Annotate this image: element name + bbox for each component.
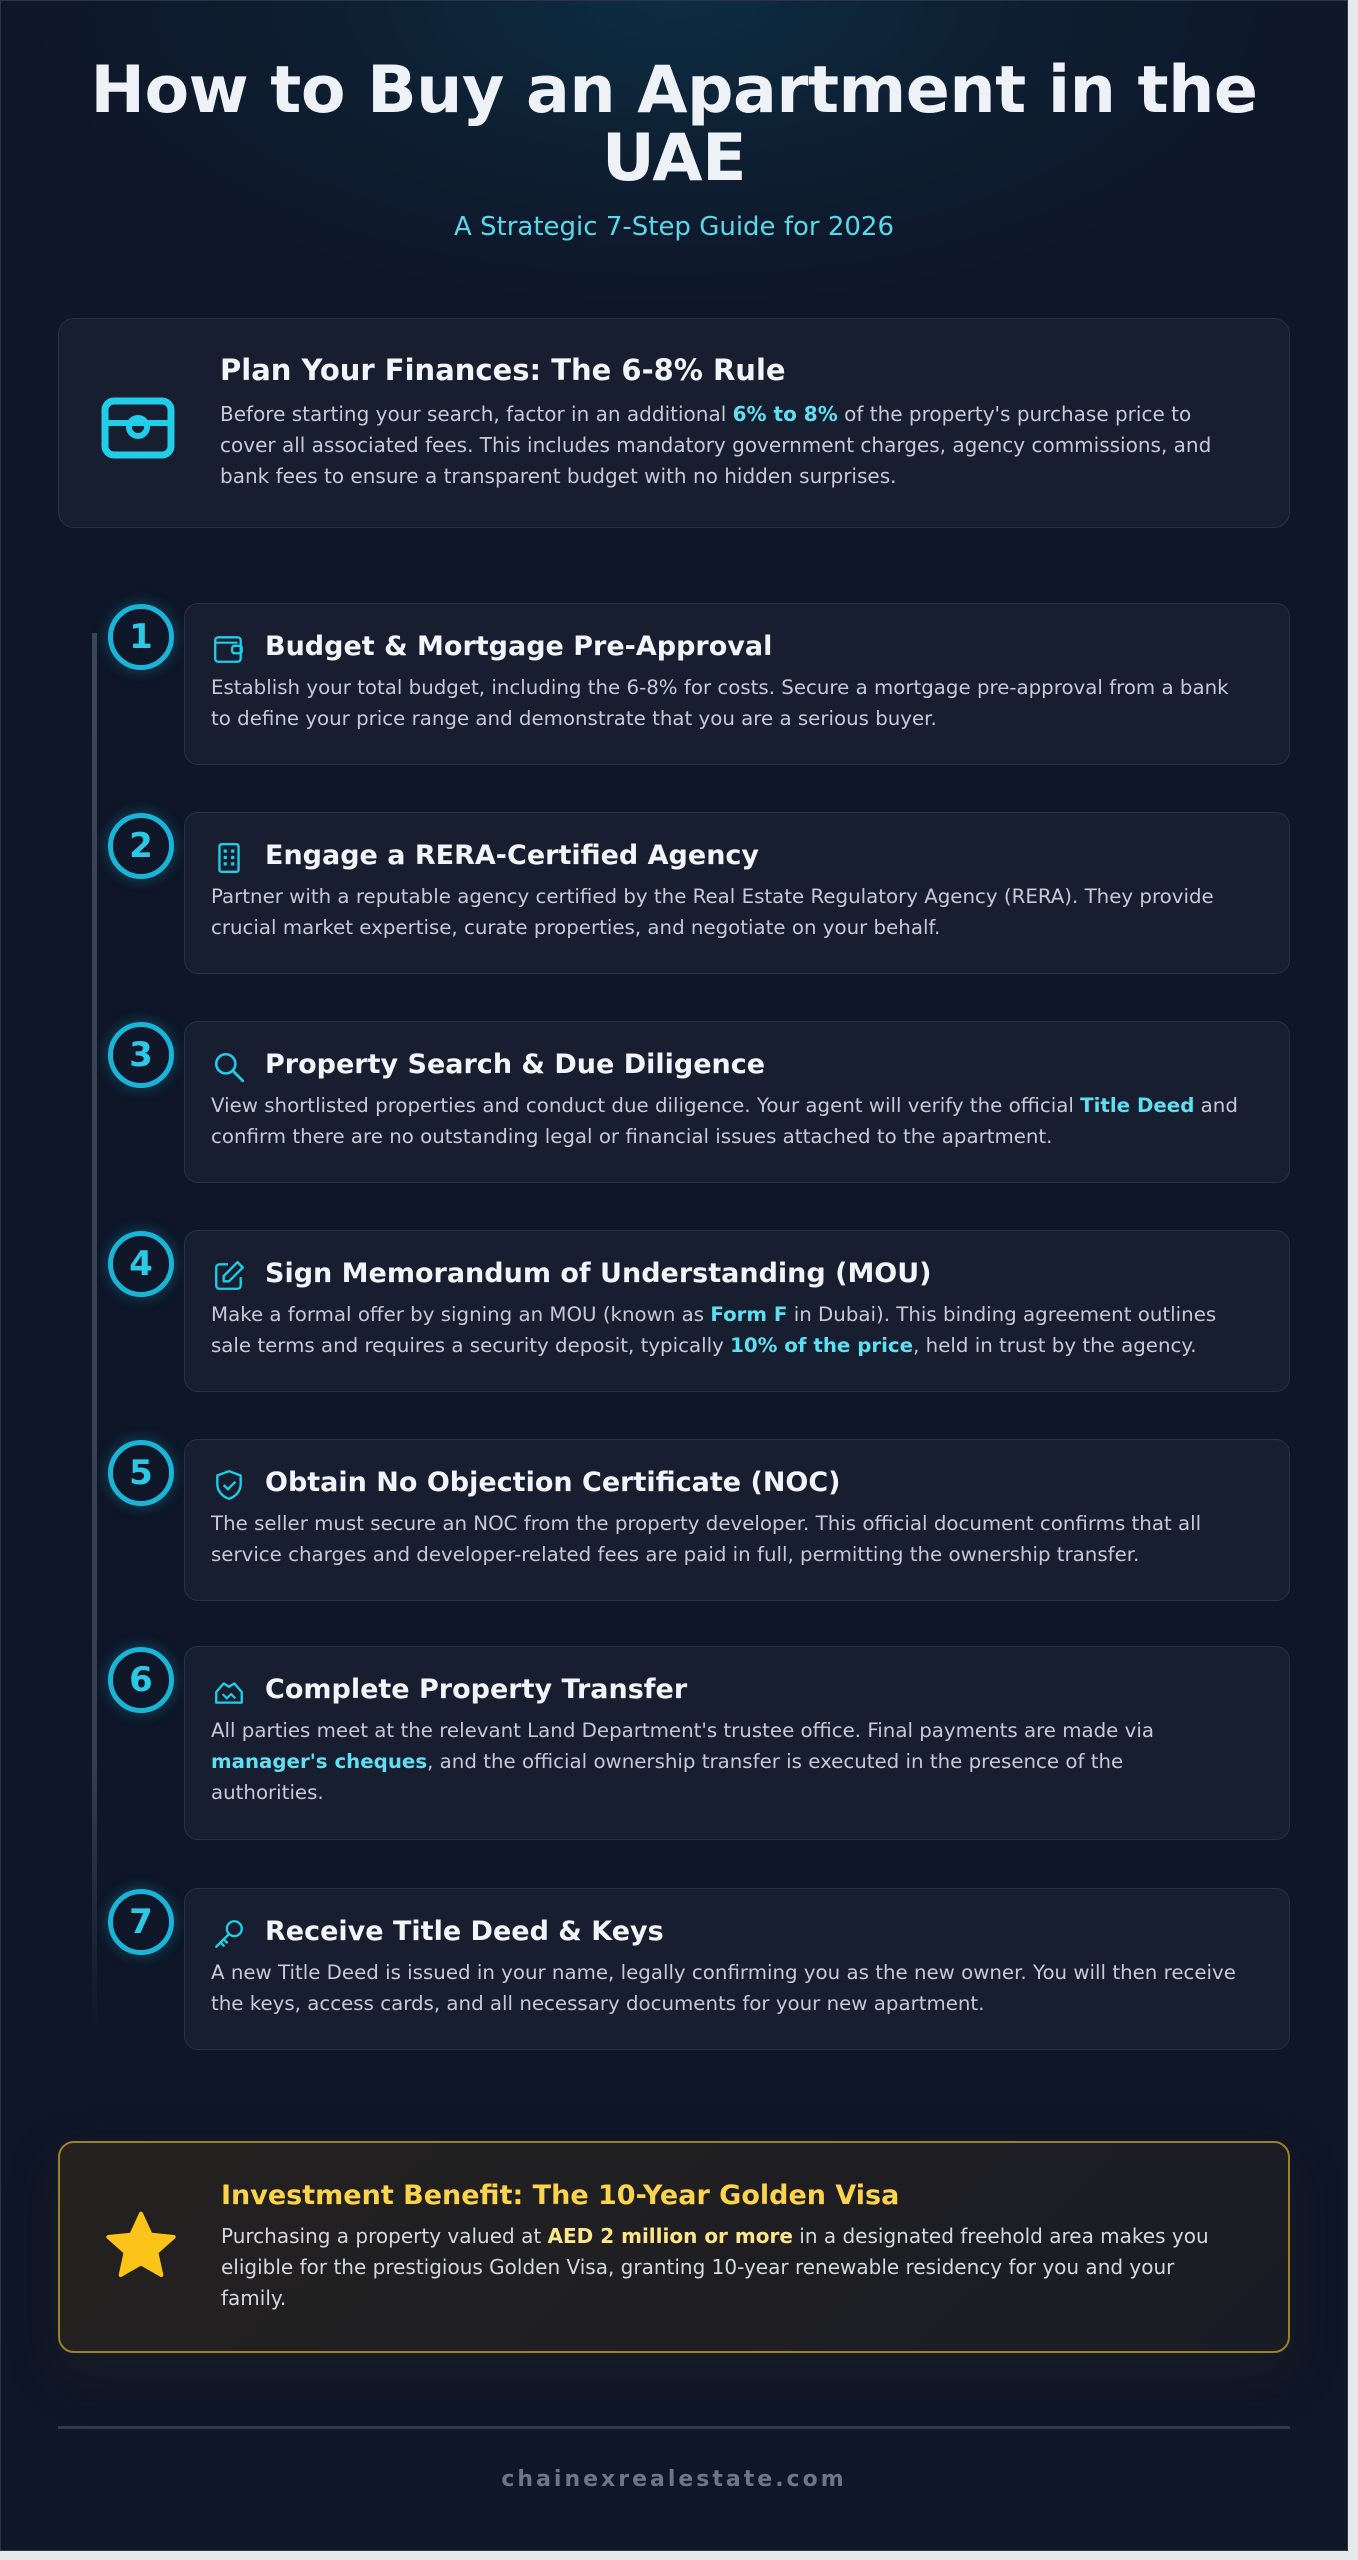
step 6 number: 6: [129, 1660, 153, 1700]
panel: step 2: Engage a RERA-Certified Agency: [265, 840, 759, 871]
title: UAE: [602, 121, 746, 196]
panel: step 2: Partner with a reputable agency certified by the Real Estate Regulatory Agency (RERA). They provide: [211, 885, 1214, 908]
panel: step 5: service charges and developer-related fees are paid in full, permitting the ownership transfer.: [211, 1543, 1139, 1566]
step 6 number: [108, 1647, 174, 1713]
panel: step 5: Obtain No Objection Certificate (NOC): [265, 1467, 841, 1498]
heading: Plan Your Finances: The 6-8% Rule: [220, 353, 786, 387]
panel: step 6: All parties meet at the relevant Land Department's trustee office. Final payments are made via: [211, 1719, 1154, 1742]
step 1 number: 1: [129, 617, 153, 657]
icon: pen: [215, 1261, 244, 1290]
icon: search: [215, 1053, 244, 1082]
panel: step 4: sale terms and requires a security deposit, typically 10% of the price, held in trust by the agency.: [211, 1334, 1197, 1357]
step 5 number: 5: [129, 1453, 153, 1493]
panel: step 5: [184, 1439, 1290, 1601]
panel: step 4: Make a formal offer by signing an MOU (known as Form F in Dubai). This binding agreement outlines: [211, 1303, 1216, 1326]
panel: step 6: manager's cheques, and the official ownership transfer is executed in the presence of the: [211, 1750, 1123, 1773]
panel: step 7: the keys, access cards, and all necessary documents for your new apartment.: [211, 1992, 984, 2015]
panel: step 6: Complete Property Transfer: [265, 1674, 687, 1705]
icon: money: [102, 398, 174, 458]
title: How to Buy an Apartment in the: [91, 53, 1257, 128]
icon: building: [218, 843, 240, 873]
title: [91, 53, 1257, 196]
panel: golden visa: [58, 2141, 1290, 2353]
icon: star: [106, 2212, 176, 2278]
text block: Before starting your search, factor in an additional 6% to 8% of the property's purchase price to cover all associated fees. This includes mandatory government charges, agency commissions, and bank fees to ensure a transparent budget with no hidden surprises.: [220, 402, 1211, 488]
step 7 number: [108, 1889, 174, 1955]
step 3 number: [108, 1022, 174, 1088]
panel: step 1: [184, 603, 1290, 765]
panel: step 2: crucial market expertise, curate properties, and negotiate on your behalf.: [211, 916, 940, 939]
panel: step 1: Establish your total budget, including the 6-8% for costs. Secure a mortgage pre-approval from a bank: [211, 676, 1229, 699]
heading: Investment Benefit: The 10-Year Golden Visa: [221, 2180, 899, 2211]
step 4 number: 4: [129, 1244, 153, 1284]
panel: step 6: authorities.: [211, 1781, 324, 1804]
subtitle: A Strategic 7-Step Guide for 2026: [454, 212, 894, 242]
step 5 number: [108, 1440, 174, 1506]
icon: shield: [216, 1470, 242, 1500]
step 1 number: [108, 604, 174, 670]
panel: step 4: Sign Memorandum of Understanding (MOU): [265, 1258, 932, 1289]
step 7 number: 7: [129, 1902, 153, 1942]
step 4 number: [108, 1231, 174, 1297]
icon: wallet: [214, 636, 243, 663]
panel: finances 6-8% rule: [58, 318, 1290, 528]
panel: step 7: [184, 1888, 1290, 2050]
panel: step 6: [184, 1646, 1290, 1840]
timeline line: [92, 633, 97, 2033]
panel: step 7: Receive Title Deed & Keys: [265, 1916, 664, 1947]
panel: step 4: [184, 1230, 1290, 1392]
panel: step 3: View shortlisted properties and conduct due diligence. Your agent will verify the official Title Deed and: [211, 1094, 1238, 1117]
panel: step 5: The seller must secure an NOC from the property developer. This official document confirms that all: [211, 1512, 1201, 1535]
footer: chainexrealestate.com: [501, 2467, 847, 2492]
panel: step 2: [184, 812, 1290, 974]
panel: step 3: [184, 1021, 1290, 1183]
panel: step 3: Property Search & Due Diligence: [265, 1049, 765, 1080]
step 3 number: 3: [129, 1035, 153, 1075]
icon: key: [215, 1920, 243, 1948]
step 2 number: 2: [129, 826, 153, 866]
text block: Purchasing a property valued at AED 2 million or more in a designated freehold area makes you eligible for the prestigious Golden Visa, granting 10-year renewable residency for you and your family.: [221, 2224, 1209, 2310]
step 2 number: [108, 813, 174, 879]
panel: step 1: to define your price range and demonstrate that you are a serious buyer.: [211, 707, 937, 730]
icon: handshake: [215, 1682, 243, 1704]
panel: step 3: confirm there are no outstanding legal or financial issues attached to the apartment.: [211, 1125, 1052, 1148]
panel: step 1: Budget & Mortgage Pre-Approval: [265, 631, 772, 662]
panel: step 7: A new Title Deed is issued in your name, legally confirming you as the new owner. You will then receive: [211, 1961, 1236, 1984]
